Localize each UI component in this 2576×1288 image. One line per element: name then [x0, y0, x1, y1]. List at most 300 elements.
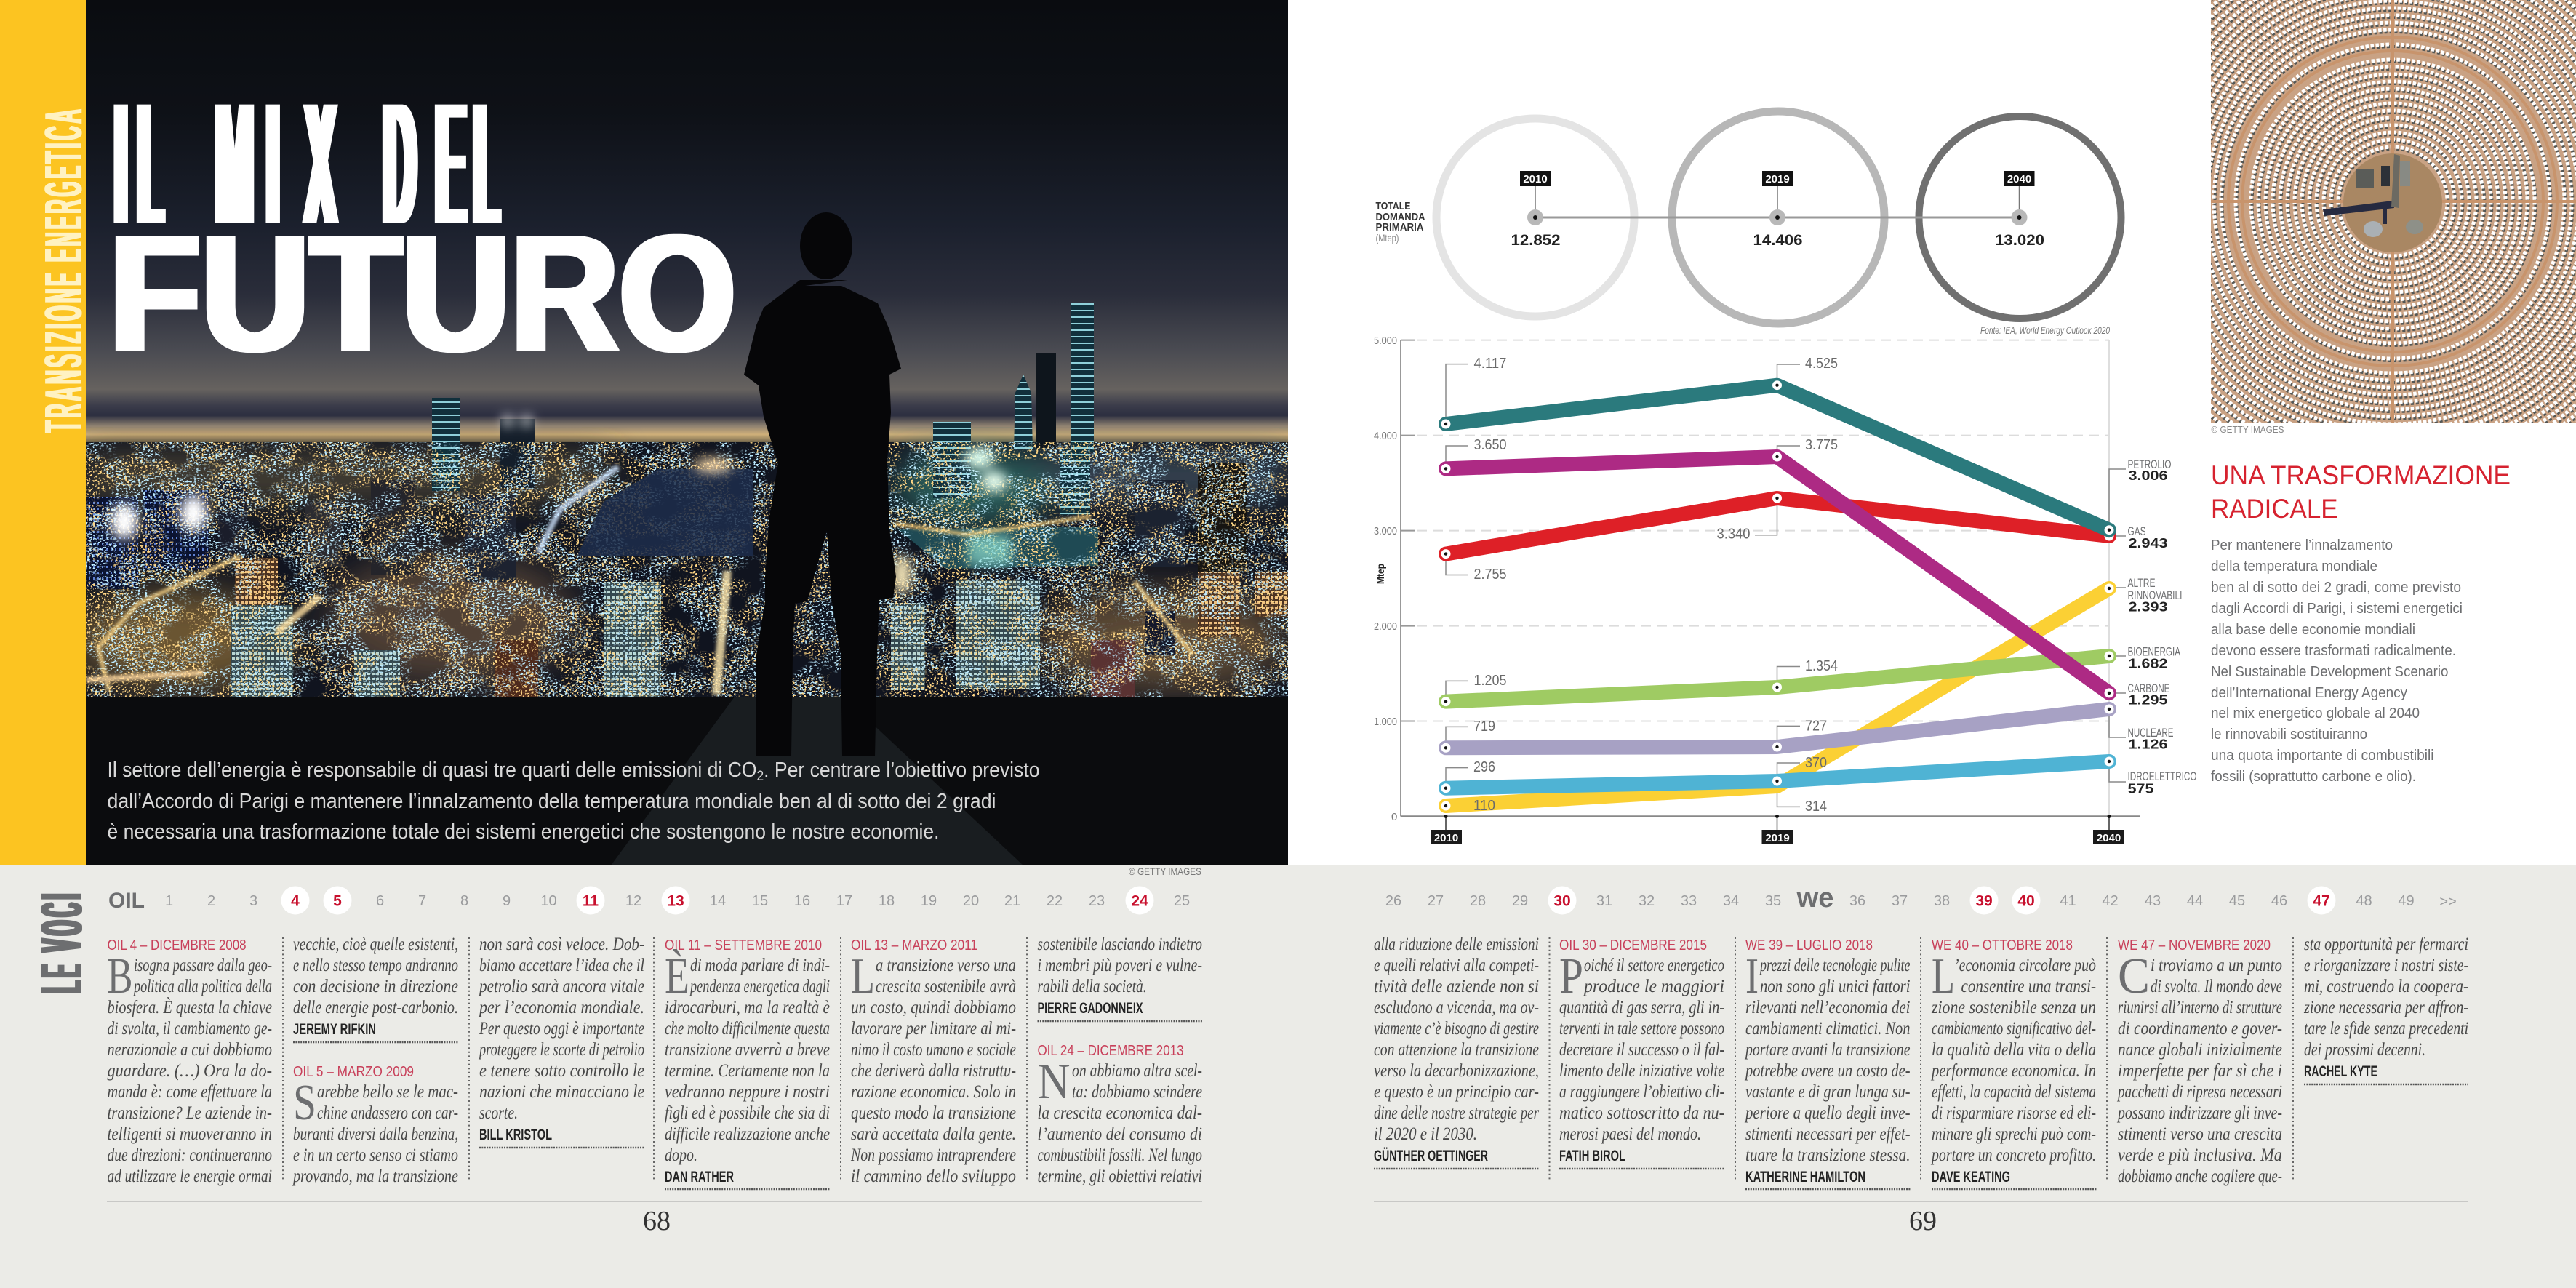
- label: total primary demand: TOTALE: [1376, 200, 1411, 212]
- text column 1: Rifkin: di svolta, il cambiamento ge-: [108, 1019, 272, 1039]
- text column 6: Gadonneix, Oil 24: [1037, 935, 1202, 1186]
- intro paragraph on photo: è necessaria una trasformazione totale dei sistemi energetici che sostengono le nostre economie.: [108, 820, 940, 844]
- issue index: We: >>: [2439, 894, 2457, 910]
- y axis labels: 1.000: [1374, 716, 1397, 728]
- text column 1: Rifkin: ad utilizzare le energie ormai: [108, 1167, 272, 1186]
- issue index: We: 48: [2356, 893, 2372, 909]
- text column 11: Kyte: possano indirizzare gli inve-: [2116, 1103, 2282, 1123]
- text column 10: Keating: la qualità della vita o della: [1932, 1040, 2096, 1060]
- issue index: We: 33: [1681, 893, 1697, 909]
- issue index: We: [1385, 883, 2457, 915]
- issue index: We: 42: [2102, 893, 2119, 909]
- text column 11: Kyte: pacchetti di ripresa necessari: [2116, 1082, 2282, 1102]
- series labels 2040: CARBONE: [2128, 681, 2170, 695]
- text column 4: Rather: vedranno neppure i nostri: [665, 1082, 830, 1102]
- issue index: We: 44: [2187, 893, 2203, 909]
- quote heading: OIL 5 – MARZO 2009: [293, 1064, 414, 1080]
- series labels 2040: [2128, 457, 2196, 796]
- x axis year tags: 2010: [1434, 832, 1458, 844]
- text column 5: Gadonneix: un costo, quindi dobbiamo: [851, 998, 1016, 1017]
- series labels 2040: BIOENERGIA: [2128, 644, 2180, 659]
- line chart: energy mix: [1374, 335, 2196, 844]
- text column 11: Kyte: stimenti verso una crescita: [2118, 1124, 2282, 1144]
- marker 2010: 12.852: [1511, 232, 1561, 249]
- issue index: We: 38: [1934, 893, 1950, 909]
- side paragraph: ben al di sotto dei 2 gradi, come previsto: [2211, 580, 2461, 596]
- text column 8: Birol: merosi paesi del mondo.: [1559, 1124, 1701, 1144]
- intro paragraph on photo: . Per centrare l’obiettivo previsto: [764, 759, 1040, 782]
- text column 10: Keating: effetti, la capacità del sistema: [1932, 1082, 2096, 1102]
- issue index: Oil: 2: [207, 893, 215, 909]
- text column 2: Rifkin, Kristol: e in un certo senso ci stiamo: [293, 1145, 458, 1165]
- text column 10: Keating: di risparmiare risorse ed eli-: [1932, 1103, 2096, 1123]
- text column 5: Gadonneix: a transizione verso una: [876, 956, 1016, 975]
- issue index: Oil: 19: [921, 893, 937, 909]
- data values 2019: 1.354: [1805, 658, 1838, 674]
- text column 3: Kristol: e tenere sotto controllo le: [479, 1061, 644, 1081]
- text column 9: Hamilton: periore a quello degli inve-: [1744, 1103, 1910, 1123]
- issue index: We: 30: [1553, 893, 1571, 909]
- label: total primary demand: [1376, 200, 1425, 244]
- text column 3: Kristol: proteggere le scorte di petrolio: [479, 1040, 644, 1060]
- issue index: Oil: 16: [794, 893, 810, 909]
- page number 68: 68: [643, 1206, 671, 1236]
- series labels 2040: GAS: [2128, 524, 2145, 538]
- drop cap: B: [108, 948, 132, 1004]
- text column 7: Oettinger: [1374, 935, 1539, 1169]
- series labels 2040: 2.943: [2128, 536, 2167, 551]
- text column 1: Rifkin: telligenti si muoveranno in: [108, 1124, 272, 1144]
- text column 6: Gadonneix, Oil 24: i membri più poveri e vulne-: [1037, 956, 1202, 975]
- text column 9: Hamilton: rilevanti nell’economia dei: [1745, 998, 1911, 1017]
- data values 2010: 3.650: [1473, 437, 1507, 453]
- issue index: Oil: 8: [460, 893, 468, 909]
- text column 3: Kristol: biamo accettare l’idea che il: [479, 956, 644, 975]
- series labels 2040: 2.393: [2128, 599, 2167, 614]
- text column 9: Hamilton: non sono gli unici fattori: [1760, 977, 1911, 996]
- heading: Una trasformazione radicale: UNA TRASFORMAZIONE: [2211, 460, 2511, 490]
- text column 8: Birol: limento delle iniziative volte: [1559, 1061, 1724, 1081]
- text column 8: Birol: [1559, 937, 1724, 1169]
- quote heading: OIL 24 – DICEMBRE 2013: [1037, 1043, 1184, 1059]
- text column 11: Kyte: riunirsi all’interno di strutture: [2118, 998, 2282, 1017]
- text column 12: Kyte: dei prossimi decenni.: [2304, 1040, 2425, 1060]
- text column 5: Gadonneix: sarà accettata dalla gente.: [851, 1124, 1016, 1144]
- text column 6: Gadonneix, Oil 24: termine, gli obiettivi relativi: [1037, 1167, 1202, 1186]
- intro paragraph on photo: 2: [757, 769, 764, 784]
- text column 9: Hamilton: vastante e di gran lunga su-: [1745, 1082, 1910, 1102]
- circle 2019: [1672, 111, 1884, 324]
- data values 2010: 296: [1473, 759, 1495, 775]
- photo: solar power plant from above: [2211, 0, 2576, 423]
- marker 2019: 2019: [1765, 173, 1790, 185]
- issue index: We: 39: [1975, 893, 1993, 909]
- issue index: Oil: 22: [1047, 893, 1063, 909]
- text column 7: Oettinger: con attenzione la transizione: [1374, 1040, 1539, 1060]
- text column 9: Hamilton: portare avanti la transizione: [1744, 1040, 1910, 1060]
- issue index: Oil: 24: [1131, 893, 1148, 909]
- side paragraph: Nel Sustainable Development Scenario: [2211, 664, 2448, 680]
- text column 8: Birol: quantità di gas serra, gli in-: [1559, 998, 1724, 1017]
- text column 11: Kyte: i troviamo a un punto: [2151, 956, 2282, 975]
- circle 2010: [1436, 119, 1634, 316]
- text column 3: Kristol: Per questo oggi è importante: [479, 1019, 644, 1039]
- quote heading: OIL 11 – SETTEMBRE 2010: [665, 937, 822, 953]
- side paragraph: dagli Accordi di Parigi, i sistemi energetici: [2211, 601, 2463, 617]
- data values 2019: [1716, 356, 1838, 815]
- text column 8: Birol: produce le maggiori: [1583, 977, 1724, 996]
- side paragraph: fossili (soprattutto carbone e olio).: [2211, 769, 2416, 785]
- text column 11: Kyte: nance globali inizialmente: [2118, 1040, 2282, 1060]
- section label: Le voci: LE VOCI: [28, 894, 94, 993]
- side paragraph: alla base delle economie mondiali: [2211, 622, 2415, 638]
- text column 12: Kyte: e riorganizzare i nostri siste-: [2304, 956, 2468, 975]
- series: bioenergia: [1441, 652, 2113, 706]
- y axis labels: 3.000: [1374, 525, 1397, 537]
- title line 1: Il mix del: IL MIX DEL: [115, 68, 498, 260]
- text column 10: Keating: ’economia circolare può: [1954, 956, 2096, 975]
- issue index: Oil: 25: [1174, 893, 1190, 909]
- issue index: We: 47: [2313, 893, 2330, 909]
- page number 69: 69: [1909, 1206, 1937, 1236]
- marker 2040: 2040: [2007, 173, 2031, 185]
- series labels 2040: ALTRE: [2128, 576, 2156, 590]
- text column 9: Hamilton: stimenti necessari per effet-: [1745, 1124, 1910, 1144]
- text column 10: Keating: [1930, 937, 2097, 1189]
- data values 2019: 3.340: [1716, 527, 1750, 543]
- quote heading: WE 40 – OTTOBRE 2018: [1932, 937, 2073, 953]
- series labels 2040: IDROELETTRICO: [2128, 769, 2196, 783]
- bottom panel background: [0, 865, 2576, 1288]
- text column 2: Rifkin, Kristol: [292, 935, 458, 1186]
- issue index: We: 41: [2060, 893, 2076, 909]
- y axis labels: [1374, 335, 1397, 823]
- text column 2: Rifkin, Kristol: delle energie post-carbonio.: [293, 998, 458, 1017]
- text column 7: Oettinger: e questo è un principio car-: [1374, 1082, 1539, 1102]
- issue index: We: 29: [1512, 893, 1528, 909]
- issue index: Oil: 14: [710, 893, 726, 909]
- text column 3: Kristol: scorte.: [479, 1103, 518, 1123]
- issue index: We: 36: [1849, 893, 1865, 909]
- text column 1: Rifkin: manda è: come effettuare la: [108, 1082, 272, 1102]
- text column 3: Kristol: nazioni che minacciano le: [479, 1082, 644, 1102]
- series: altre rinnovabili: [1441, 583, 2113, 810]
- side paragraph: dell’International Energy Agency: [2211, 685, 2407, 701]
- drop cap: L: [851, 948, 875, 1004]
- issue index: Oil: 23: [1089, 893, 1105, 909]
- y axis labels: 2.000: [1374, 620, 1397, 633]
- text column 5: Gadonneix: nimo il costo umano e sociale: [851, 1040, 1016, 1060]
- text column 12: Kyte: tare le sfide senza precedenti: [2304, 1019, 2468, 1039]
- heading: Una trasformazione radicale: [2211, 460, 2511, 524]
- text column 12: Kyte: mi, costruendo la coopera-: [2304, 977, 2468, 996]
- text column 5: Gadonneix: lavorare per limitare al mi-: [851, 1019, 1016, 1039]
- source note: Fonte: IEA, World Energy Outlook 2020: [1980, 324, 2110, 336]
- drop cap: N: [1037, 1054, 1071, 1110]
- marker 2019: 14.406: [1753, 232, 1802, 249]
- text column 2: Rifkin, Kristol: con decisione in direzione: [293, 977, 458, 996]
- data values 2010: 2.755: [1473, 567, 1507, 583]
- text column 4: Rather: termine. Certamente non la: [665, 1061, 830, 1081]
- issue index: Oil: 3: [249, 893, 257, 909]
- text column 5: Gadonneix: razione economica. Solo in: [851, 1082, 1016, 1102]
- data values 2010: 1.205: [1473, 673, 1507, 689]
- text column 10: Keating: portare un concreto profitto.: [1930, 1145, 2096, 1165]
- text column 5: Gadonneix: che deriverà dalla ristruttu-: [851, 1061, 1016, 1081]
- y axis labels: 0: [1391, 811, 1397, 823]
- author: FATIH BIROL: [1559, 1148, 1625, 1164]
- issue index: Oil: 9: [503, 893, 511, 909]
- text column 2: Rifkin, Kristol: e nello stesso tempo andranno: [293, 956, 458, 975]
- side paragraph: [2211, 537, 2463, 785]
- series labels 2040: 575: [2128, 782, 2154, 796]
- text column 6: Gadonneix, Oil 24: l’aumento del consumo di: [1037, 1124, 1202, 1144]
- series: idroelettrico: [1441, 756, 2113, 793]
- author: DAVE KEATING: [1932, 1169, 2010, 1185]
- text column 4: Rather: pendenza energetica dagli: [689, 977, 830, 996]
- text column 4: Rather: difficile realizzazione anche: [665, 1124, 830, 1144]
- text column 7: Oettinger: tività delle aziende non si: [1374, 977, 1539, 996]
- text column 8: Birol: matico sottoscritto da nu-: [1559, 1103, 1724, 1123]
- side paragraph: una quota importante di combustibili: [2211, 748, 2433, 764]
- side paragraph: Per mantenere l’innalzamento: [2211, 537, 2393, 553]
- text column 8: Birol: oiché il settore energetico: [1584, 956, 1724, 975]
- drop cap: P: [1559, 948, 1583, 1004]
- text column 10: Keating: consentire una transi-: [1961, 977, 2096, 996]
- y axis labels: 4.000: [1374, 430, 1397, 442]
- text column 1: Rifkin: [108, 937, 272, 1186]
- issue index: Oil: 13: [667, 893, 684, 909]
- text column 2: Rifkin, Kristol: arebbe bello se le mac-: [317, 1082, 458, 1102]
- text column 5: Gadonneix: [850, 937, 1016, 1186]
- series labels 2040: 1.126: [2128, 737, 2167, 752]
- label: total primary demand: DOMANDA: [1376, 211, 1425, 223]
- marker 2019: [1753, 171, 1802, 249]
- photo credit: © GETTY IMAGES: [2211, 424, 2284, 435]
- text column 2: Rifkin, Kristol: vecchie, cioè quelle esistenti,: [293, 935, 458, 954]
- text column 9: Hamilton: cambiamenti climatici. Non: [1745, 1019, 1910, 1039]
- issue index: We: 32: [1639, 893, 1655, 909]
- text column 11: Kyte: imperfette per far sì che i: [2118, 1061, 2282, 1081]
- issue index: We: 27: [1428, 893, 1444, 909]
- issue index: Oil: 10: [540, 893, 557, 909]
- x axis year tags: 2040: [2097, 832, 2121, 844]
- silhouette: man: [744, 212, 901, 756]
- text column 7: Oettinger: escludono a vicenda, ma ov-: [1374, 998, 1539, 1017]
- quote heading: OIL 13 – MARZO 2011: [851, 937, 977, 953]
- text column 6: Gadonneix, Oil 24: la crescita economica dal-: [1037, 1103, 1202, 1123]
- issue index: Oil: 15: [752, 893, 768, 909]
- text column 10: Keating: minare gli sprechi può com-: [1932, 1124, 2096, 1144]
- side paragraph: le rinnovabili sostituiranno: [2211, 727, 2367, 743]
- text column 9: Hamilton: prezzi delle tecnologie pulite: [1759, 956, 1910, 975]
- circle 2040: [1919, 116, 2121, 319]
- text column 10: Keating: zione sostenibile senza un: [1931, 998, 2096, 1017]
- side paragraph: devono essere trasformati radicalmente.: [2211, 643, 2456, 659]
- data values 2019: 314: [1805, 799, 1827, 815]
- y axis labels: 5.000: [1374, 335, 1397, 347]
- drop cap: L: [1932, 948, 1955, 1004]
- text column 3: Kristol: petrolio sarà ancora vitale: [478, 977, 644, 996]
- text column 12: Kyte: zione necessaria per affron-: [2303, 998, 2468, 1017]
- text column 3: Kristol: per l’economia mondiale.: [478, 998, 644, 1017]
- text column 5: Gadonneix: crescita sostenibile avrà: [876, 977, 1016, 996]
- text column 4: Rather: dopo.: [665, 1145, 697, 1165]
- text column 1: Rifkin: politica alla politica della: [133, 977, 272, 996]
- text column 6: Gadonneix, Oil 24: ta: dobbiamo scindere: [1072, 1082, 1202, 1102]
- text column 7: Oettinger: alla riduzione delle emissioni: [1374, 935, 1539, 954]
- series labels 2040: PETROLIO: [2128, 457, 2172, 471]
- series: nucleare: [1441, 704, 2113, 753]
- issue index: We: 43: [2145, 893, 2161, 909]
- data values 2010: 110: [1473, 798, 1495, 814]
- text column 2: Rifkin, Kristol: buranti diversi dalla benzina,: [293, 1124, 458, 1144]
- issue index: Oil: 20: [963, 893, 979, 909]
- issue index: We: 31: [1596, 893, 1612, 909]
- text column 3: Kristol: [478, 935, 644, 1148]
- text column 1: Rifkin: transizione? Le aziende in-: [108, 1103, 272, 1123]
- text column 1: Rifkin: biosfera. È questa la chiave: [108, 997, 272, 1017]
- text column 1: Rifkin: guardare. (…) Ora la do-: [108, 1061, 272, 1081]
- text column 1: Rifkin: due direzioni: continueranno: [108, 1145, 272, 1165]
- quote heading: OIL 4 – DICEMBRE 2008: [108, 937, 246, 953]
- yellow side band: [0, 0, 86, 865]
- photo credit: © GETTY IMAGES: [1129, 865, 1201, 877]
- text column 7: Oettinger: il 2020 e il 2030.: [1374, 1124, 1477, 1144]
- issue index: Oil: 1: [165, 893, 173, 909]
- author: JEREMY RIFKIN: [293, 1021, 376, 1038]
- text column 4: Rather: idrocarburi, ma la realtà è: [665, 998, 830, 1017]
- text column 4: Rather: transizione avverrà a breve: [665, 1040, 830, 1060]
- text column 6: Gadonneix, Oil 24: on abbiamo altra scel-: [1072, 1061, 1202, 1081]
- author: DAN RATHER: [665, 1169, 734, 1185]
- index title Oil: OIL: [108, 889, 145, 913]
- text column 10: Keating: cambiamento significativo del-: [1932, 1019, 2096, 1039]
- intro paragraph on photo: dall’Accordo di Parigi e mantenere l’innalzamento della temperatura mondiale ben al di sotto dei 2 gradi: [108, 790, 996, 813]
- text column 6: Gadonneix, Oil 24: rabili della società.: [1037, 977, 1146, 996]
- x axis year tags: 2019: [1765, 832, 1790, 844]
- text column 6: Gadonneix, Oil 24: combustibili fossili. Nel lungo: [1037, 1145, 1202, 1165]
- rooftop walkway: [611, 697, 1023, 865]
- drop cap: C: [2118, 948, 2150, 1004]
- rooftop wall: [86, 697, 1288, 865]
- text column 2: Rifkin, Kristol: provando, ma la transizione: [292, 1167, 458, 1186]
- intro paragraph on photo: Il settore dell’energia è responsabile di quasi tre quarti delle emissioni di CO: [108, 759, 817, 782]
- photo: person overlooking night city: [73, 0, 1288, 865]
- marker 2040: 13.020: [1995, 232, 2044, 249]
- data values 2019: 4.525: [1805, 356, 1838, 372]
- author: PIERRE GADONNEIX: [1037, 1000, 1143, 1017]
- section label: Transizione energetica: TRANSIZIONE ENERGETICA: [34, 109, 93, 433]
- text column 8: Birol: decretare il successo o il fal-: [1559, 1040, 1724, 1060]
- drop cap: S: [293, 1075, 316, 1131]
- issue index: Oil: 12: [625, 893, 641, 909]
- issue index: Oil: 21: [1004, 893, 1020, 909]
- author: KATHERINE HAMILTON: [1745, 1169, 1865, 1185]
- series labels 2040: RINNOVABILI: [2128, 588, 2182, 602]
- text column 7: Oettinger: viamente c’è bisogno di gestire: [1374, 1019, 1539, 1039]
- text column 11: Kyte: verde e più inclusiva. Ma: [2118, 1145, 2282, 1165]
- text column 5: Gadonneix: il cammino dello sviluppo: [851, 1167, 1016, 1186]
- issue index: We: 34: [1723, 893, 1739, 909]
- issue index: Oil: 11: [583, 893, 599, 909]
- total demand circles: [1376, 111, 2121, 324]
- series labels 2040: 1.295: [2128, 692, 2167, 707]
- issue index: Oil: 6: [376, 893, 384, 909]
- issue index: Oil: [108, 886, 1190, 915]
- text column 9: Hamilton: [1744, 937, 1911, 1189]
- text column 9: Hamilton: potrebbe avere un costo de-: [1744, 1061, 1910, 1081]
- text column 11: Kyte: [2116, 937, 2282, 1186]
- text column 4: Rather: figli ed è possibile che sia di: [665, 1103, 830, 1123]
- title line 2: Futuro: FUTURO: [109, 201, 736, 386]
- data values 2019: 3.775: [1805, 437, 1838, 453]
- text column 11: Kyte: dobbiamo anche cogliere que-: [2118, 1167, 2282, 1186]
- issue index: Oil: 17: [836, 893, 852, 909]
- quote heading: OIL 30 – DICEMBRE 2015: [1559, 937, 1707, 953]
- intro paragraph on photo: [108, 759, 1040, 844]
- text column 4: Rather: che molto difficilmente questa: [665, 1019, 830, 1039]
- text column 12: Kyte: sta opportunità per fermarci: [2304, 935, 2468, 954]
- text column 1: Rifkin: nerazionale a cui dobbiamo: [108, 1040, 272, 1060]
- issue index: Oil: 5: [333, 893, 342, 909]
- issue index: We: 45: [2229, 893, 2245, 909]
- y axis title: Mtep: [1375, 564, 1386, 584]
- marker 2010: [1511, 171, 1561, 249]
- label: total primary demand: PRIMARIA: [1376, 221, 1424, 233]
- text column 5: Gadonneix: questo modo la transizione: [851, 1103, 1016, 1123]
- issue index: Oil: 4: [291, 893, 300, 909]
- data values 2010: [1473, 356, 1507, 814]
- text column 7: Oettinger: dine delle nostre strategie per: [1374, 1103, 1539, 1123]
- label: total primary demand: (Mtep): [1376, 232, 1399, 244]
- text column 7: Oettinger: verso la decarbonizzazione,: [1374, 1061, 1539, 1081]
- x axis year tags: [1431, 815, 2124, 844]
- text column 11: Kyte: di svolta. Il mondo deve: [2151, 977, 2282, 996]
- text column 4: Rather: [665, 937, 830, 1189]
- series: petrolio: [1441, 380, 2113, 535]
- issue index: We: 46: [2271, 893, 2287, 909]
- marker 2040: [1995, 171, 2044, 249]
- quote heading: WE 47 – NOVEMBRE 2020: [2118, 937, 2271, 953]
- text column 4: Rather: di moda parlare di indi-: [690, 956, 830, 975]
- side paragraph: nel mix energetico globale al 2040: [2211, 705, 2420, 721]
- series labels 2040: NUCLEARE: [2128, 726, 2173, 740]
- data values 2010: 4.117: [1473, 356, 1507, 372]
- drop cap: È: [665, 948, 689, 1004]
- side paragraph: della temperatura mondiale: [2211, 559, 2377, 575]
- text column 11: Kyte: di coordinamento e gover-: [2118, 1019, 2282, 1039]
- heading: Una trasformazione radicale: RADICALE: [2211, 494, 2337, 524]
- issue index: We: 49: [2398, 893, 2415, 909]
- text column 9: Hamilton: tuare la transizione stessa.: [1745, 1145, 1910, 1165]
- drop cap: I: [1745, 948, 1759, 1004]
- series: gas: [1441, 493, 2113, 559]
- author: RACHEL KYTE: [2304, 1063, 2377, 1080]
- text column 10: Keating: performance economica. In: [1930, 1061, 2096, 1081]
- quote heading: WE 39 – LUGLIO 2018: [1745, 937, 1873, 953]
- issue index: Oil: 18: [879, 893, 895, 909]
- marker 2010: 2010: [1523, 173, 1548, 185]
- text column 5: Gadonneix: Non possiamo intraprendere: [850, 1145, 1016, 1165]
- series: carbone: [1441, 452, 2113, 697]
- text column 8: Birol: terventi in tale settore possono: [1559, 1019, 1724, 1039]
- text column 6: Gadonneix, Oil 24: sostenibile lasciando indietro: [1037, 935, 1202, 954]
- issue index: Oil: 7: [418, 893, 426, 909]
- text column 12: Kyte: [2303, 935, 2468, 1084]
- issue index: We: 40: [2017, 893, 2035, 909]
- text column 3: Kristol: non sarà così veloce. Dob-: [479, 935, 644, 954]
